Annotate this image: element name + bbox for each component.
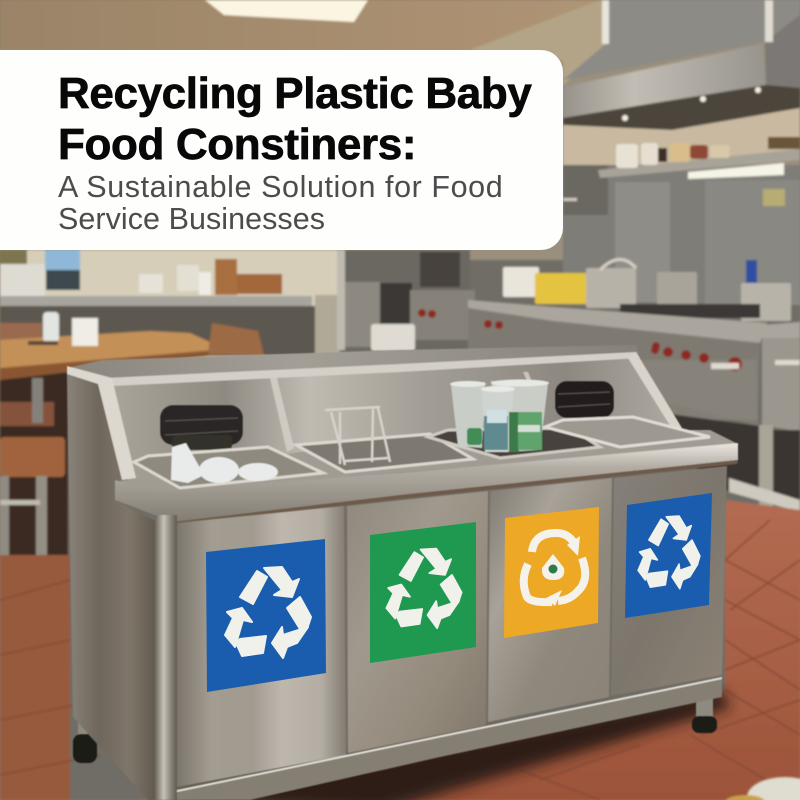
recycling label: blue left <box>206 539 326 692</box>
under-unit shadow <box>150 690 730 800</box>
trays <box>134 447 323 488</box>
corner post <box>155 515 177 800</box>
back kitchen equipment <box>345 250 800 547</box>
slots <box>160 405 243 445</box>
subtitle <box>58 170 503 236</box>
table, chairs and stools <box>0 312 264 584</box>
recycling label: green <box>370 522 476 663</box>
lid front rail <box>105 352 640 386</box>
heading <box>58 69 532 169</box>
back panel <box>110 356 680 490</box>
recycling label: yellow <box>504 507 599 638</box>
hood <box>563 0 800 130</box>
feet <box>73 690 717 763</box>
subtitle: A Sustainable Solution for Food <box>58 170 503 204</box>
title panel <box>0 50 563 250</box>
metal rack <box>325 407 390 465</box>
clear cups <box>450 380 549 452</box>
doors <box>177 506 346 787</box>
heading: Food Constiners: <box>58 120 416 169</box>
white cups in left tray <box>171 443 278 483</box>
back wall shelf with containers <box>563 108 800 305</box>
diagonal strips <box>67 366 136 480</box>
side panel <box>67 368 157 800</box>
heading: Recycling Plastic Baby <box>58 69 531 118</box>
subtitle: Service Businesses <box>58 202 325 236</box>
recycling station <box>67 345 738 800</box>
countertop surface <box>115 430 738 492</box>
counter front edge <box>115 443 738 522</box>
floor tiles <box>0 500 800 800</box>
dining area wall and counter <box>0 250 345 360</box>
bottom rail <box>177 678 722 800</box>
foreground object corner <box>725 777 800 800</box>
lid top <box>67 345 640 378</box>
recycling label: blue right <box>625 493 712 618</box>
